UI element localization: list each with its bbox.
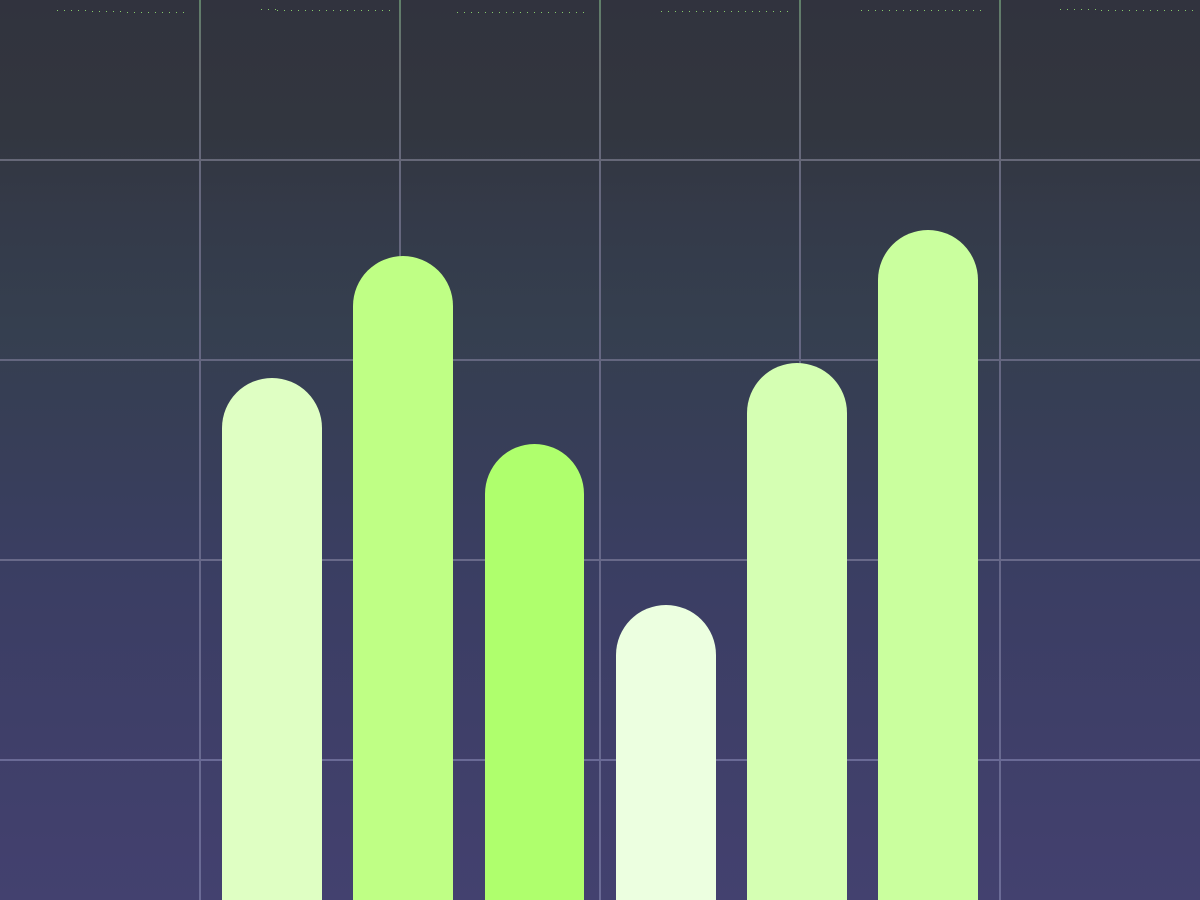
bar 4	[616, 605, 716, 900]
bar 6	[878, 230, 978, 900]
dotted tick marks along the top	[57, 10, 1193, 12]
bar 5	[747, 363, 847, 900]
bar 2	[353, 256, 453, 900]
bar 3	[485, 444, 584, 900]
bar 1	[222, 378, 322, 900]
